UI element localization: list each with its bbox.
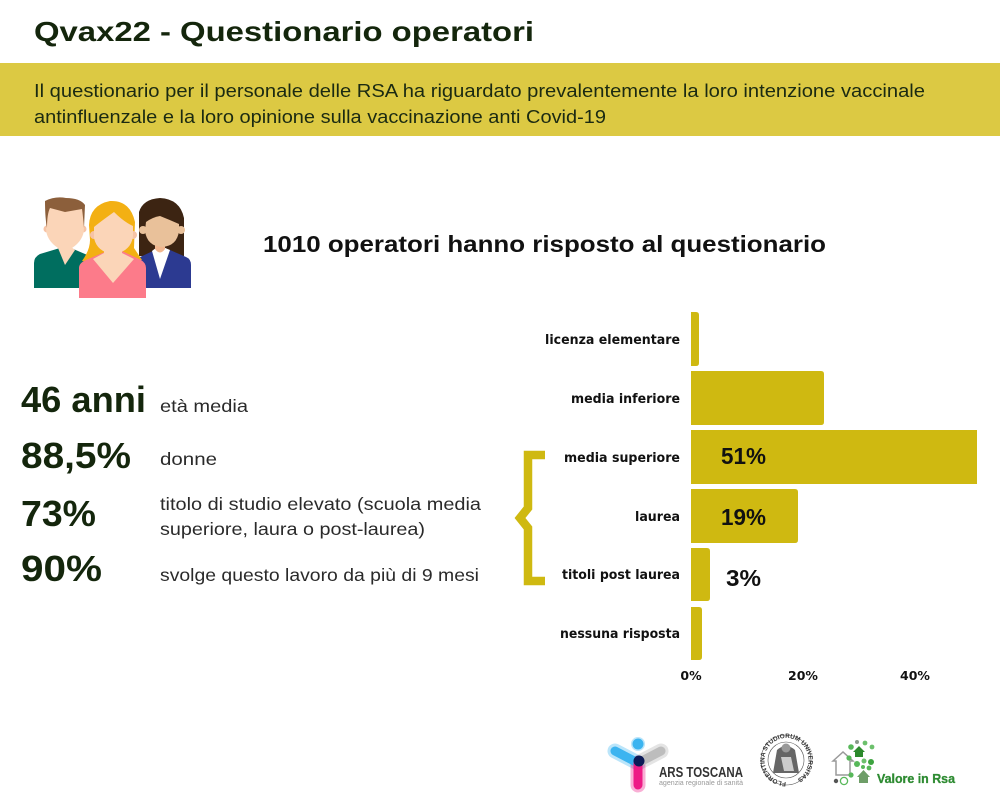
category labels: titoli post laurea [562, 568, 680, 583]
category labels [545, 333, 680, 642]
intro banner [0, 63, 1000, 136]
respondents heading: 1010 operatori hanno risposto al questionario [263, 231, 826, 257]
value labels: 51% [721, 443, 766, 469]
category labels: nessuna risposta [560, 627, 680, 642]
logo: Università di Firenze seal: FLORENTINA STUDIORUM UNIVERSITAS [760, 734, 813, 786]
bars [691, 312, 977, 660]
stat: women [21, 435, 217, 476]
woman dark hair [139, 198, 184, 256]
category labels: media inferiore [571, 392, 680, 407]
category labels: laurea [635, 510, 680, 525]
stat: education: 73% [21, 493, 96, 534]
stat: women: 88,5% [21, 435, 131, 476]
logo: Valore in Rsa: Valore in Rsa [877, 771, 956, 786]
logo: ARS Toscana [615, 738, 744, 787]
value labels: 19% [721, 504, 766, 530]
stat: women: donne [160, 449, 217, 469]
axis labels: 20% [788, 668, 818, 683]
title: Qvax22 - Questionario operatori [34, 16, 534, 47]
logo: ARS Toscana: agenzia regionale di sanità [659, 778, 744, 787]
axis labels: 40% [900, 668, 930, 683]
key stats [21, 379, 481, 589]
bar chart: education level [545, 312, 977, 683]
stat: tenure [21, 548, 479, 589]
value labels [721, 443, 766, 591]
category labels: licenza elementare [545, 333, 680, 348]
icon: three health workers [34, 197, 191, 298]
category labels: media superiore [564, 451, 680, 466]
stat: tenure: svolge questo lavoro da più di 9 mesi [160, 565, 479, 585]
logo: ARS Toscana: ARS TOSCANA [659, 764, 743, 781]
stat: education: titolo di studio elevato (scuola media [160, 494, 481, 514]
stat: education [21, 493, 481, 539]
stat: age: 46 anni [21, 379, 146, 420]
bracket [520, 455, 545, 581]
value labels: 3% [726, 565, 761, 591]
stat: age: età media [160, 396, 248, 416]
intro banner: Il questionario per il personale delle RSA ha riguardato prevalentemente la loro intenzione vaccinale [34, 80, 925, 101]
intro banner: antinfluenzale e la loro opinione sulla vaccinazione anti Covid-19 [34, 106, 606, 127]
axis labels: 0% [680, 668, 702, 683]
woman blonde [82, 201, 142, 262]
man [34, 248, 92, 288]
axis labels [680, 668, 930, 683]
logo: Valore in Rsa [833, 740, 956, 786]
stat: tenure: 90% [21, 548, 102, 589]
stat: age [21, 379, 248, 420]
stat: education: superiore, laura o post-laurea) [160, 519, 425, 539]
